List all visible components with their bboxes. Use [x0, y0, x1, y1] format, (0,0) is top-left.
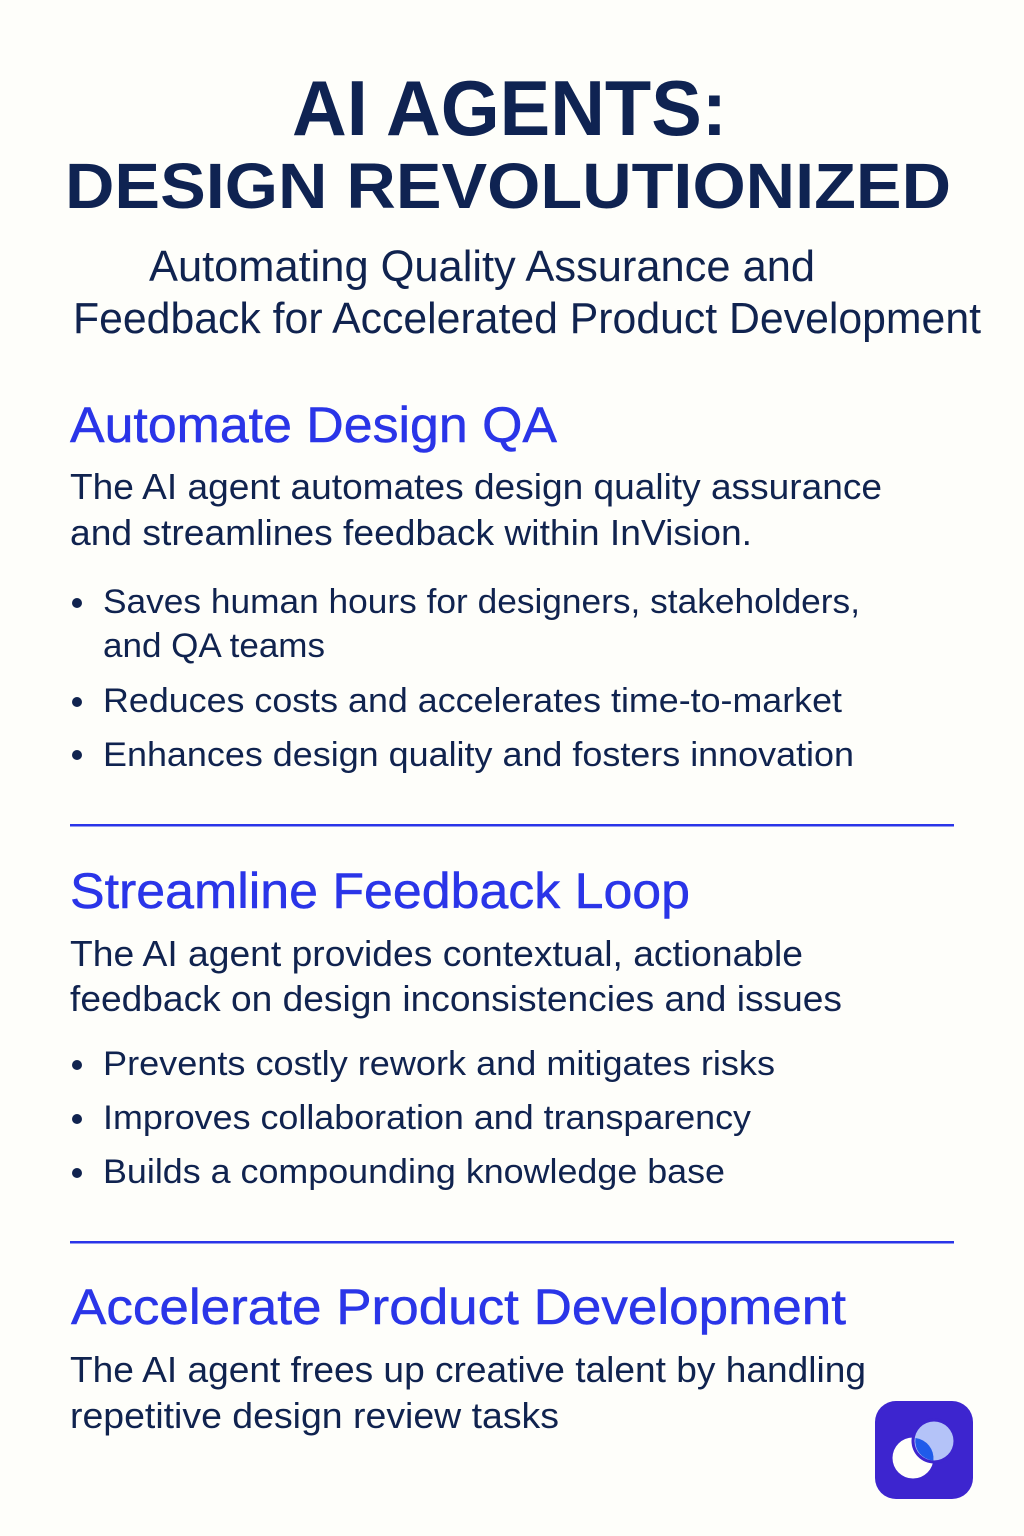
panel: streamline feedback loop	[70, 863, 842, 1191]
bullet list: automate benefits: Reduces costs and accelerates time-to-market	[103, 682, 842, 720]
bullet list: streamline benefits: Improves collaboration and transparency	[103, 1099, 752, 1137]
subtitle	[73, 242, 981, 343]
bullet list: streamline benefits	[72, 1045, 775, 1191]
icon: overlapping circles logo	[875, 1401, 973, 1499]
bullet list: automate benefits	[72, 583, 860, 774]
subtitle: Automating Quality Assurance and	[149, 242, 815, 291]
text block: accelerate description	[70, 1349, 866, 1436]
title	[65, 64, 951, 222]
text block: automate description	[70, 466, 882, 553]
bullet list: automate benefits: and QA teams	[103, 627, 325, 665]
bullet list: automate benefits: Enhances design quality and fosters innovation	[103, 736, 854, 774]
text block: accelerate description: The AI agent frees up creative talent by handling	[70, 1349, 866, 1390]
title: DESIGN REVOLUTIONIZED	[65, 150, 951, 222]
text block: automate description: and streamlines feedback within InVision.	[70, 512, 752, 553]
bullet list: streamline benefits: Builds a compounding knowledge base	[103, 1153, 725, 1191]
subtitle: Feedback for Accelerated Product Development	[73, 294, 981, 343]
heading: streamline feedback loop: Streamline Feedback Loop	[70, 863, 690, 919]
heading: accelerate product development: Accelerate Product Development	[71, 1279, 846, 1335]
panel: automate design QA	[70, 397, 882, 774]
text block: streamline description	[70, 933, 842, 1019]
title: AI AGENTS:	[292, 64, 727, 152]
bullet list: automate benefits: Saves human hours for designers, stakeholders,	[103, 583, 860, 621]
panel: accelerate product development	[70, 1279, 866, 1436]
text block: automate description: The AI agent automates design quality assurance	[70, 466, 882, 507]
bullet list: streamline benefits: Prevents costly rework and mitigates risks	[103, 1045, 775, 1083]
text block: streamline description: The AI agent provides contextual, actionable	[70, 933, 803, 974]
heading: automate design QA: Automate Design QA	[70, 397, 558, 453]
text block: streamline description: feedback on design inconsistencies and issues	[70, 978, 842, 1019]
text block: accelerate description: repetitive design review tasks	[70, 1395, 559, 1436]
